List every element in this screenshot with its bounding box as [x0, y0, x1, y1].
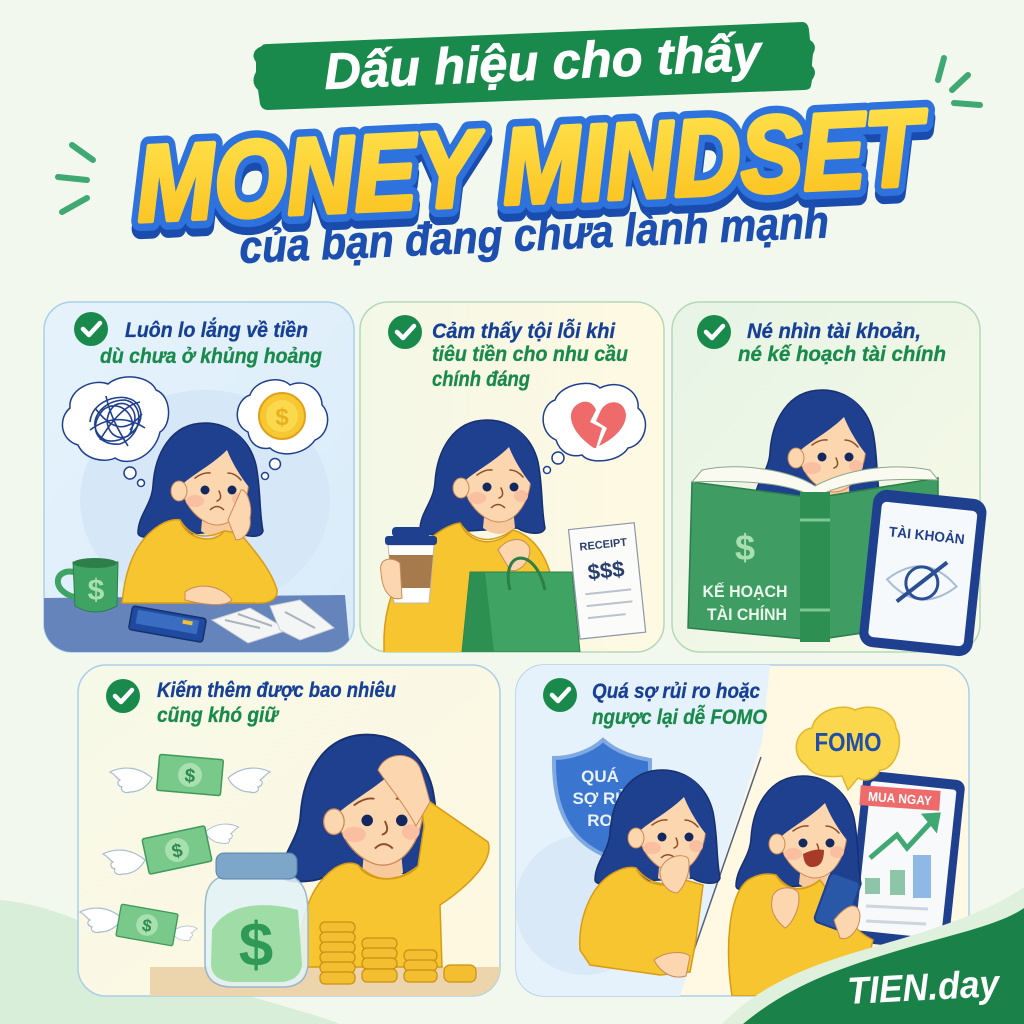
heading [432, 320, 628, 391]
mug: $ [88, 574, 105, 607]
character [755, 390, 880, 505]
book [688, 467, 938, 642]
hidden eye icon [885, 556, 959, 607]
receipt: RECEIPT [579, 537, 628, 554]
heading: Kiếm thêm được bao nhiêu [157, 679, 396, 702]
shield: SỢ RỦ [572, 789, 628, 808]
title: money mindset: MONEY MINDSET [134, 86, 931, 244]
title line 3: của bạn đang chưa lành mạnh [238, 195, 830, 273]
character: worried [580, 770, 720, 977]
shield: QUÁ [581, 767, 619, 786]
buy now banner: MUA NGAY [868, 789, 933, 808]
divider [693, 757, 761, 953]
thought bubble: broken heart [543, 383, 645, 474]
check icon [388, 315, 422, 349]
shield [554, 740, 650, 855]
sparks left [58, 145, 93, 212]
heading: cũng khó giữ [157, 704, 280, 727]
mug [58, 558, 118, 612]
fomo bubble: FOMO [814, 727, 882, 757]
bars [865, 855, 931, 898]
panel: hard to keep [78, 665, 500, 997]
heading [157, 679, 396, 727]
bottom-left wave [0, 900, 340, 1024]
check icon [74, 312, 108, 346]
calculator [128, 606, 207, 642]
panel: always worried [44, 302, 354, 652]
panel: fear or fomo [515, 665, 969, 996]
heading [592, 680, 767, 729]
table [150, 967, 500, 997]
check icon [106, 679, 140, 713]
jar [205, 853, 308, 987]
shield: RO [587, 811, 613, 830]
check icon [543, 678, 577, 712]
heading [100, 319, 322, 368]
title: money mindset: MONEY MINDSET [134, 86, 931, 244]
receipt [569, 523, 646, 639]
flying bills [80, 754, 270, 946]
heading: chính đáng [432, 368, 530, 391]
shopping bag [462, 558, 580, 652]
phone in hand [813, 872, 861, 932]
tablet [854, 772, 965, 945]
character [281, 735, 489, 967]
panel: guilt [360, 302, 664, 660]
book: KẾ HOẠCH [702, 582, 788, 601]
receipt: $$$ [586, 556, 626, 585]
title line 1: Dấu hiệu cho thấy [323, 24, 765, 100]
phone: TÀI KHOẢN [888, 523, 965, 547]
book: TÀI CHÍNH [707, 605, 787, 624]
heading: Né nhìn tài khoản, [747, 320, 921, 343]
heading: dù chưa ở khủng hoảng [100, 345, 322, 368]
heading: Quá sợ rủi ro hoặc [592, 680, 760, 703]
heading: ngược lại dễ FOMO [592, 706, 767, 729]
buy now banner [859, 785, 941, 811]
phone [858, 488, 988, 658]
logo corner wave [722, 887, 1024, 1024]
logo text: TIEN.day [846, 963, 1002, 1013]
receipts [212, 600, 334, 643]
heading: né kế hoạch tài chính [738, 343, 946, 366]
heading: tiêu tiền cho nhu cầu [432, 343, 628, 366]
thought bubble: coin: $ [275, 404, 289, 431]
heading: Luôn lo lắng về tiền [125, 319, 308, 342]
coin stacks [320, 922, 476, 984]
character [122, 423, 277, 605]
thought bubble: scribble [62, 377, 169, 486]
table [44, 595, 350, 652]
character: excited [729, 776, 873, 996]
rising arrow [870, 820, 933, 858]
jar: $ [239, 911, 273, 980]
thought bubble: coin [237, 380, 328, 480]
book label: $ [735, 527, 755, 568]
heading: Cảm thấy tội lỗi khi [432, 320, 616, 343]
heading [738, 320, 946, 366]
fomo bubble [796, 707, 899, 790]
character [384, 420, 560, 660]
title: money mindset: MONEY MINDSET [134, 94, 932, 252]
sparks right [938, 58, 980, 105]
title banner [253, 22, 815, 110]
panel: avoid accounts [672, 302, 988, 658]
check icon [697, 315, 731, 349]
coffee cup [381, 527, 437, 603]
